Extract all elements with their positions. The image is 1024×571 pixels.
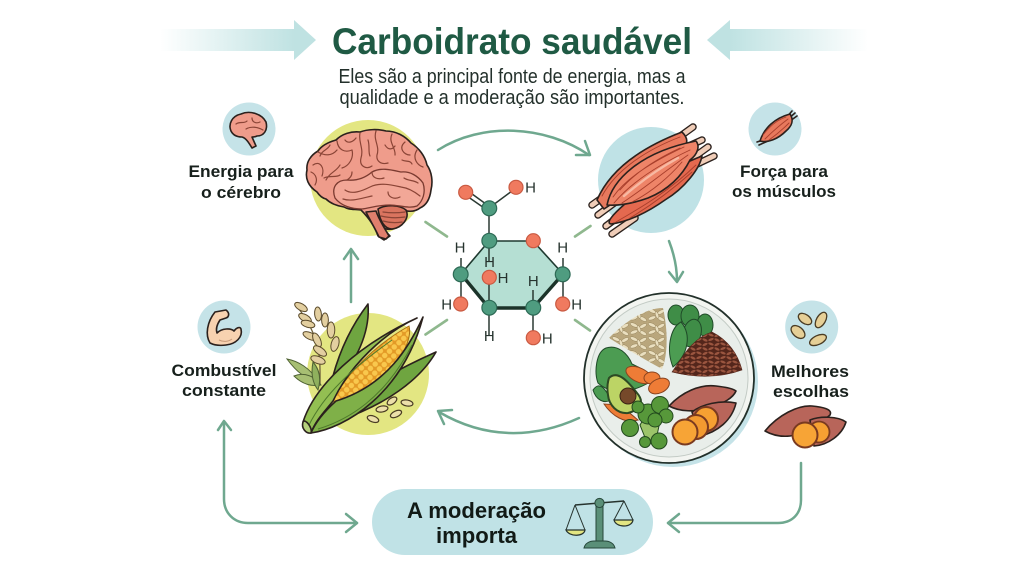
arrow: moderation to constant fuel bbox=[218, 421, 357, 532]
pill: moderation matters bbox=[372, 489, 653, 555]
subtitle bbox=[338, 66, 686, 109]
pill text bbox=[407, 498, 546, 548]
icon: flexed arm bbox=[198, 300, 250, 354]
label: strength for muscles: os músculos bbox=[732, 183, 836, 201]
corn husk back leaves bbox=[333, 304, 368, 378]
label: best choices: escolhas bbox=[773, 383, 849, 401]
molecule diagram: H bbox=[484, 328, 495, 345]
icon: small muscle bbox=[748, 102, 802, 156]
upper bundle bbox=[597, 132, 687, 209]
grain stalk bbox=[287, 301, 341, 390]
molecule diagram: H bbox=[542, 330, 553, 348]
label: constant fuel bbox=[172, 362, 276, 400]
broccoli bbox=[622, 396, 673, 449]
molecule diagram: H bbox=[528, 273, 539, 290]
molecule diagram bbox=[441, 180, 582, 348]
label: constant fuel: Combustível bbox=[172, 362, 276, 380]
cycle arrow: muscle to plate bbox=[669, 241, 683, 282]
label: strength for muscles: Força para bbox=[740, 163, 829, 181]
label: strength for muscles bbox=[732, 163, 836, 201]
illustration: sweet potato bbox=[765, 406, 846, 448]
subtitle: Eles são a principal fonte de energia, mas a bbox=[338, 66, 686, 88]
title: Carboidrato saudável bbox=[332, 21, 692, 62]
sweet potato wedge bbox=[669, 386, 736, 444]
label: energy for the brain bbox=[188, 163, 294, 202]
arrow: best choices to moderation bbox=[668, 463, 801, 532]
corn husk left bbox=[303, 318, 417, 433]
molecule diagram: H bbox=[455, 240, 465, 256]
illustration: grain and corn bbox=[287, 301, 436, 435]
brown rice bbox=[609, 308, 667, 369]
corn seeds bbox=[366, 395, 413, 424]
icon: small brain bbox=[222, 102, 276, 156]
cycle arrow: plate to corn bbox=[438, 410, 579, 433]
corn cob bbox=[333, 326, 410, 402]
label: best choices: Melhores bbox=[771, 363, 849, 381]
central bundle bbox=[607, 141, 698, 205]
icon: oats bbox=[785, 300, 838, 354]
label: energy for the brain: Energia para bbox=[188, 163, 294, 181]
left vegetables bbox=[593, 347, 672, 421]
molecule diagram: H bbox=[571, 296, 582, 314]
label: constant fuel: constante bbox=[182, 382, 266, 400]
spinach bbox=[668, 305, 713, 367]
illustration: brain bbox=[306, 120, 432, 240]
illustration: muscle bbox=[592, 127, 714, 234]
molecule diagram: H bbox=[525, 180, 536, 196]
red rice mound bbox=[672, 332, 742, 376]
lower bundle bbox=[609, 156, 702, 224]
label: energy for the brain: o cérebro bbox=[201, 184, 281, 202]
pill text: importa bbox=[436, 523, 518, 548]
icon: balance scale bbox=[566, 498, 633, 548]
pill text: A moderação bbox=[407, 498, 546, 523]
connector dashes bbox=[426, 222, 590, 334]
molecule diagram: H bbox=[441, 296, 452, 314]
illustration: plate of food bbox=[584, 293, 758, 467]
corn husk right bbox=[311, 317, 423, 433]
header arrow: right bbox=[707, 20, 868, 60]
header arrow: left bbox=[160, 20, 316, 60]
cycle arrow: brain to muscle bbox=[438, 131, 590, 155]
subtitle: qualidade e a moderação são importantes. bbox=[340, 87, 684, 109]
tendons bbox=[592, 127, 714, 234]
label: best choices bbox=[771, 363, 849, 401]
molecule diagram: H bbox=[498, 270, 508, 287]
molecule diagram: H bbox=[484, 254, 495, 271]
molecule diagram: H bbox=[557, 240, 568, 256]
cycle arrow: corn to brain bbox=[344, 249, 358, 302]
